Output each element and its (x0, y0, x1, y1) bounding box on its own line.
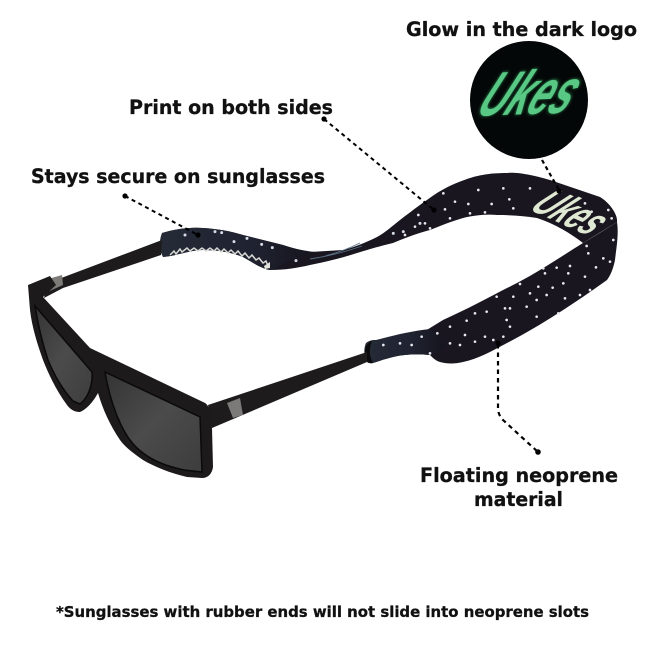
far temple (44, 240, 162, 298)
logo halo: Ukes (466, 56, 596, 130)
label line 1: Floating neoprene (420, 464, 618, 487)
end dot (535, 449, 541, 455)
strap (160, 173, 624, 364)
footnote: *Sunglasses with rubber ends will not slide into neoprene slots (56, 603, 589, 621)
leader (125, 196, 198, 235)
print highlight on far strap (310, 243, 362, 259)
frame front (28, 276, 213, 478)
label: Print on both sides (129, 96, 333, 119)
glow circle (470, 41, 588, 159)
callout: floating neoprene (420, 340, 618, 511)
near hinge (227, 398, 243, 418)
start dot (321, 116, 327, 122)
label line 2: material (474, 488, 563, 511)
start dot (122, 193, 128, 199)
leader line (542, 160, 559, 190)
sunglasses (28, 240, 367, 478)
near temple (208, 352, 367, 428)
callout: print on both sides (129, 96, 437, 213)
far sleeve (160, 228, 315, 270)
label: Stays secure on sunglasses (31, 165, 325, 188)
end dot (431, 207, 437, 213)
glowing logo (478, 66, 582, 118)
near strap band (373, 222, 618, 364)
near sleeve opening (365, 341, 373, 363)
far strap band (162, 173, 617, 270)
end dot (195, 232, 201, 238)
start dot (495, 340, 501, 346)
right lens (105, 372, 202, 472)
left lens (35, 306, 92, 404)
callout: stays secure (31, 165, 325, 238)
leader (324, 119, 434, 210)
far hinge (43, 275, 63, 294)
logo text: Ukes (466, 56, 596, 130)
callout: glow logo (406, 18, 637, 194)
speckles far sleeve (185, 223, 420, 261)
zigzag stitching (170, 248, 268, 266)
speckles near strap (383, 188, 613, 353)
near sleeve (364, 329, 446, 363)
heading: Glow in the dark logo (406, 18, 637, 41)
leader end dot (556, 188, 562, 194)
leader (498, 344, 538, 452)
